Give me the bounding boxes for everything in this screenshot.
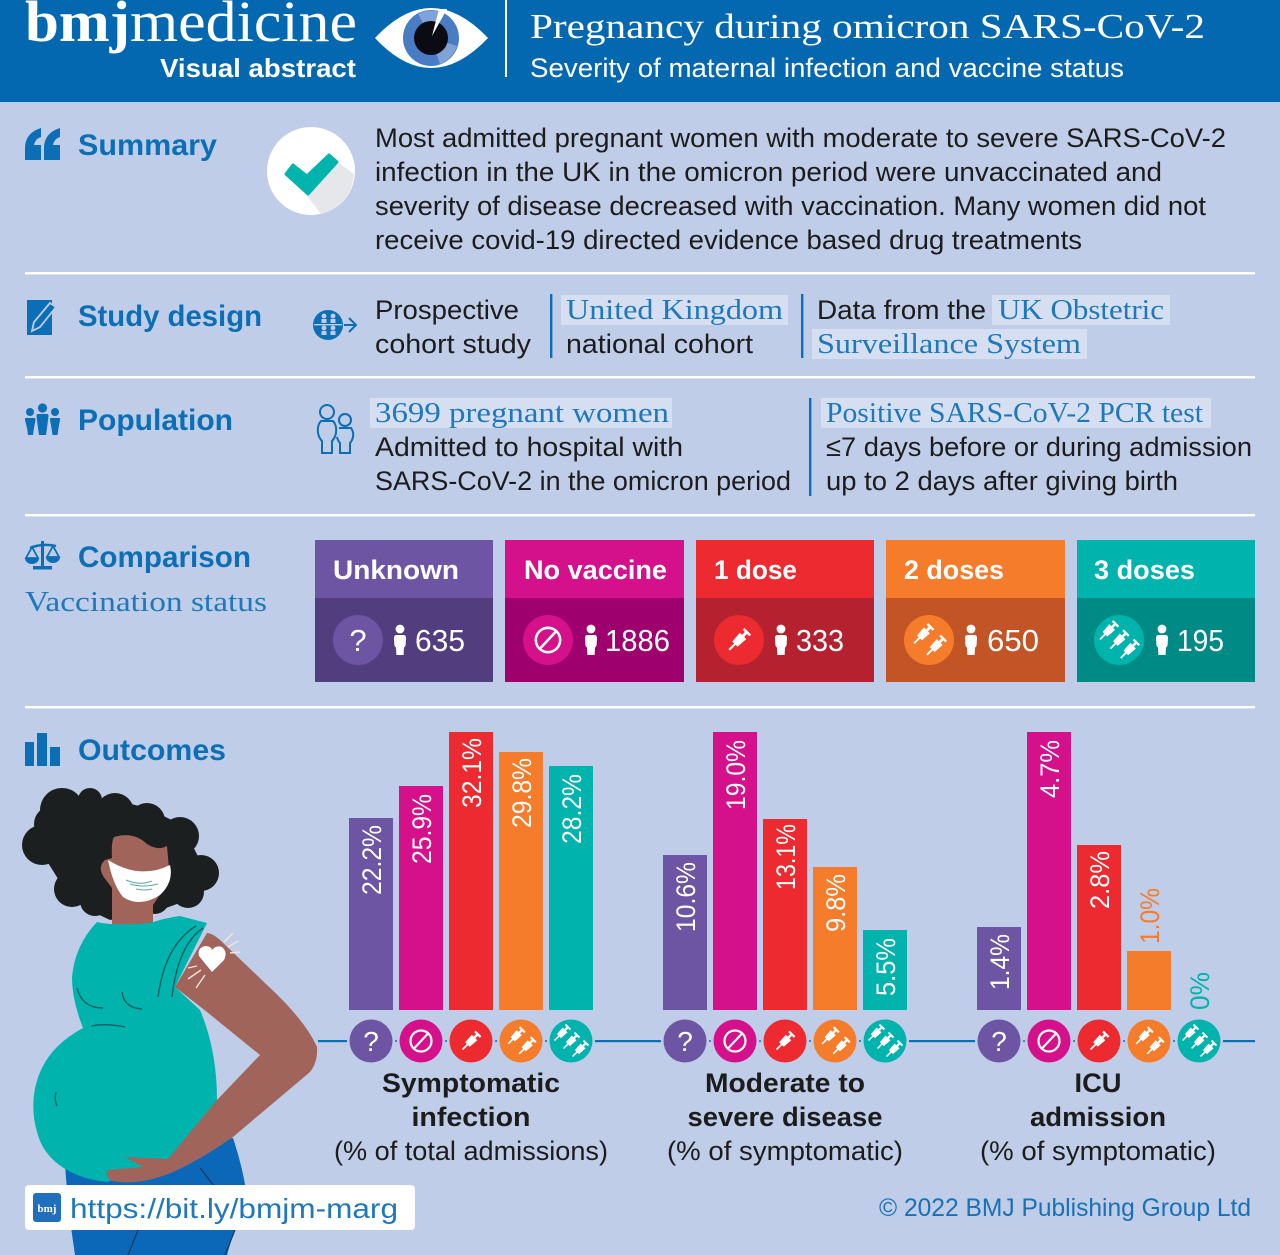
jeans — [65, 1138, 246, 1255]
card: unknown: Unknown — [333, 555, 459, 585]
inclusion criteria text: ≤7 days before or during admission — [826, 432, 1252, 462]
chart: moderate to severe disease: 10.6% — [671, 862, 701, 932]
summary text: infection in the UK in the omicron period were unvaccinated and — [375, 157, 1162, 187]
chart: ICU admission: ICU — [1074, 1068, 1122, 1098]
heading: outcomes — [25, 733, 226, 767]
chart: ICU admission: admission — [1030, 1102, 1166, 1132]
panel: population — [25, 397, 1252, 496]
card: 2 doses: 2 doses — [904, 555, 1004, 585]
icon: bmj logo: bmj — [38, 1203, 56, 1215]
cohort study text: cohort study — [375, 329, 532, 359]
card: 3 doses: 3 doses — [1094, 555, 1195, 585]
title: Pregnancy during omicron SARS-CoV-2 — [530, 7, 1205, 46]
card: 2 doses: 650 — [987, 623, 1039, 658]
link box — [25, 1185, 415, 1230]
illustration: pregnant woman — [22, 788, 317, 1255]
card: no vaccine: No vaccine — [524, 555, 667, 585]
cohort study text — [375, 295, 532, 359]
shirt — [33, 916, 217, 1182]
chart: symptomatic infection: 29.8% — [507, 758, 537, 828]
neck and face — [101, 835, 170, 925]
face mask — [108, 860, 171, 902]
url: https://bit.ly/bmjm-marg — [70, 1193, 398, 1224]
chart: moderate to severe disease: 9.8% — [821, 874, 851, 932]
national cohort text: United Kingdom — [566, 294, 783, 326]
heading: summary: Summary — [78, 129, 217, 162]
chart: symptomatic infection — [334, 732, 608, 1166]
summary text — [375, 123, 1226, 255]
card: 1 dose: 333 — [796, 623, 844, 658]
card: unknown — [315, 540, 493, 682]
card: no vaccine: 1886 — [605, 623, 670, 658]
chart: symptomatic infection: Symptomatic — [382, 1068, 560, 1098]
card: unknown: ? — [349, 623, 367, 658]
card: 3 doses: 195 — [1177, 623, 1224, 658]
icon: bmj logo — [33, 1193, 61, 1222]
chart: symptomatic infection: 32.1% — [457, 738, 487, 808]
panel: summary — [25, 123, 1226, 255]
chart: moderate to severe disease — [661, 732, 909, 1166]
card: 1 dose: 1 dose — [714, 555, 797, 585]
summary text: Most admitted pregnant women with moderate to severe SARS-CoV-2 — [375, 123, 1226, 153]
hair — [22, 788, 219, 920]
summary text: severity of disease decreased with vaccination. Many women did not — [375, 191, 1206, 221]
data source text — [812, 294, 1170, 360]
chart: symptomatic infection: infection — [412, 1102, 530, 1132]
chart: symptomatic infection: (% of total admissions) — [334, 1136, 608, 1166]
icon: quote marks — [25, 128, 60, 160]
heading: comparison: Comparison — [78, 541, 251, 574]
icon: people — [25, 403, 60, 435]
icon: bar chart — [25, 733, 60, 766]
icon: check mark — [267, 127, 355, 215]
heart plaster — [188, 933, 240, 988]
panel: study design — [27, 294, 1170, 360]
chart: ICU admission: 0% — [1185, 972, 1215, 1010]
shirt folds — [55, 926, 203, 1106]
population count text — [370, 397, 791, 496]
chart: moderate to severe disease: 5.5% — [871, 938, 901, 996]
icon: pencil — [27, 300, 56, 335]
icon: cohort — [313, 310, 356, 340]
inclusion criteria text: Positive SARS-CoV-2 PCR test — [826, 397, 1203, 429]
inclusion criteria text — [821, 397, 1252, 496]
arm and hand — [107, 933, 317, 1182]
chart: moderate to severe disease: 13.1% — [771, 824, 801, 890]
subheading: vaccination status: Vaccination status — [25, 586, 267, 618]
card: no vaccine — [505, 540, 684, 682]
header banner — [0, 0, 1280, 102]
chart: moderate to severe disease: 19.0% — [721, 740, 751, 810]
chart: ICU admission: 1.0% — [1135, 888, 1165, 944]
heading: population: Population — [78, 404, 233, 437]
chart: ICU admission: 2.8% — [1085, 851, 1115, 909]
chart: ICU admission: 1.4% — [985, 934, 1015, 990]
icon: scales — [25, 541, 60, 570]
chart: outcome bars — [318, 732, 1255, 1166]
inclusion criteria text: up to 2 days after giving birth — [826, 466, 1178, 496]
chart: symptomatic infection: 28.2% — [557, 774, 587, 844]
card: 2 doses — [886, 540, 1065, 682]
panel: comparison — [25, 540, 1255, 682]
chart: moderate to severe disease: Moderate to — [705, 1068, 865, 1098]
summary text: receive covid-19 directed evidence based drug treatments — [375, 225, 1082, 255]
copyright: © 2022 BMJ Publishing Group Ltd — [879, 1194, 1251, 1222]
data source text: Surveillance System — [817, 328, 1081, 360]
cohort study text: Prospective — [375, 295, 519, 325]
population count text: 3699 pregnant women — [375, 397, 670, 429]
chart: moderate to severe disease: (% of symptomatic) — [667, 1136, 903, 1166]
national cohort text: national cohort — [566, 329, 754, 359]
outcomes label: Outcomes — [78, 734, 226, 767]
chart: moderate to severe disease: severe disease — [688, 1102, 882, 1132]
icon: eye — [375, 8, 488, 68]
data source text: Data from the — [817, 295, 986, 325]
population count text: Admitted to hospital with — [375, 432, 683, 462]
icon: two figures outline — [318, 405, 353, 453]
card: 1 dose — [696, 540, 874, 682]
card: 3 doses — [1077, 540, 1255, 682]
chart: symptomatic infection: 25.9% — [407, 794, 437, 864]
chart: ICU admission — [975, 732, 1223, 1166]
card: unknown: 635 — [415, 623, 465, 658]
chart: ICU admission: 4.7% — [1035, 740, 1065, 798]
data source text: UK Obstetric — [998, 294, 1164, 326]
chart: ICU admission: (% of symptomatic) — [980, 1136, 1216, 1166]
visual abstract label: Visual abstract — [160, 53, 356, 83]
chart: symptomatic infection: 22.2% — [357, 825, 387, 895]
subtitle: Severity of maternal infection and vaccine status — [530, 53, 1124, 83]
heading: study design: Study design — [78, 300, 262, 333]
national cohort text — [561, 294, 788, 359]
population count text: SARS-CoV-2 in the omicron period — [375, 466, 791, 496]
